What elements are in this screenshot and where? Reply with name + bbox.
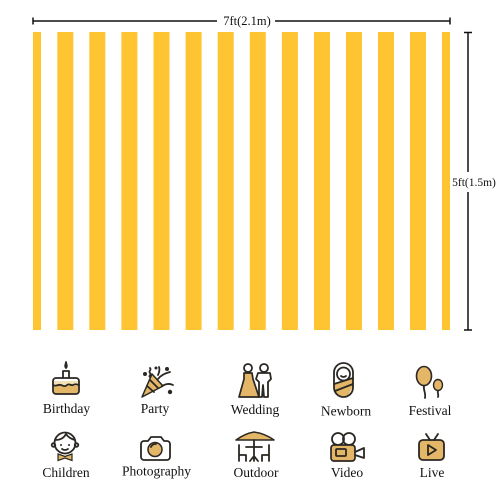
label: Party: Party bbox=[141, 401, 169, 416]
icon: camera bbox=[141, 437, 170, 460]
label: Newborn: Newborn bbox=[321, 404, 371, 418]
label: Live: Live bbox=[420, 465, 444, 480]
label: Photography: Photography bbox=[122, 464, 191, 478]
icon: newborn bbox=[334, 363, 353, 397]
label: Children: Children bbox=[42, 465, 90, 480]
label: Birthday: Birthday bbox=[43, 401, 90, 416]
width dimension arrow bbox=[33, 18, 450, 24]
height label: 5ft(1.5m) bbox=[452, 177, 496, 189]
icon: party popper bbox=[142, 366, 173, 397]
label: Outdoor: Outdoor bbox=[234, 465, 279, 480]
icon: outdoor table and umbrella bbox=[236, 432, 274, 461]
width label: 7ft(2.1m) bbox=[223, 14, 271, 28]
icon: wedding couple bbox=[239, 364, 271, 397]
icon: video camera bbox=[331, 433, 364, 461]
icon: birthday cake bbox=[53, 362, 79, 394]
icon: balloons bbox=[416, 366, 442, 398]
icon: child bbox=[52, 432, 78, 460]
icon: live tv bbox=[419, 434, 444, 460]
striped backdrop bbox=[33, 32, 450, 330]
label: Wedding: Wedding bbox=[231, 402, 279, 417]
label: Video: Video bbox=[331, 465, 363, 480]
height dimension arrow bbox=[464, 32, 472, 330]
label: Festival: Festival bbox=[409, 403, 452, 418]
